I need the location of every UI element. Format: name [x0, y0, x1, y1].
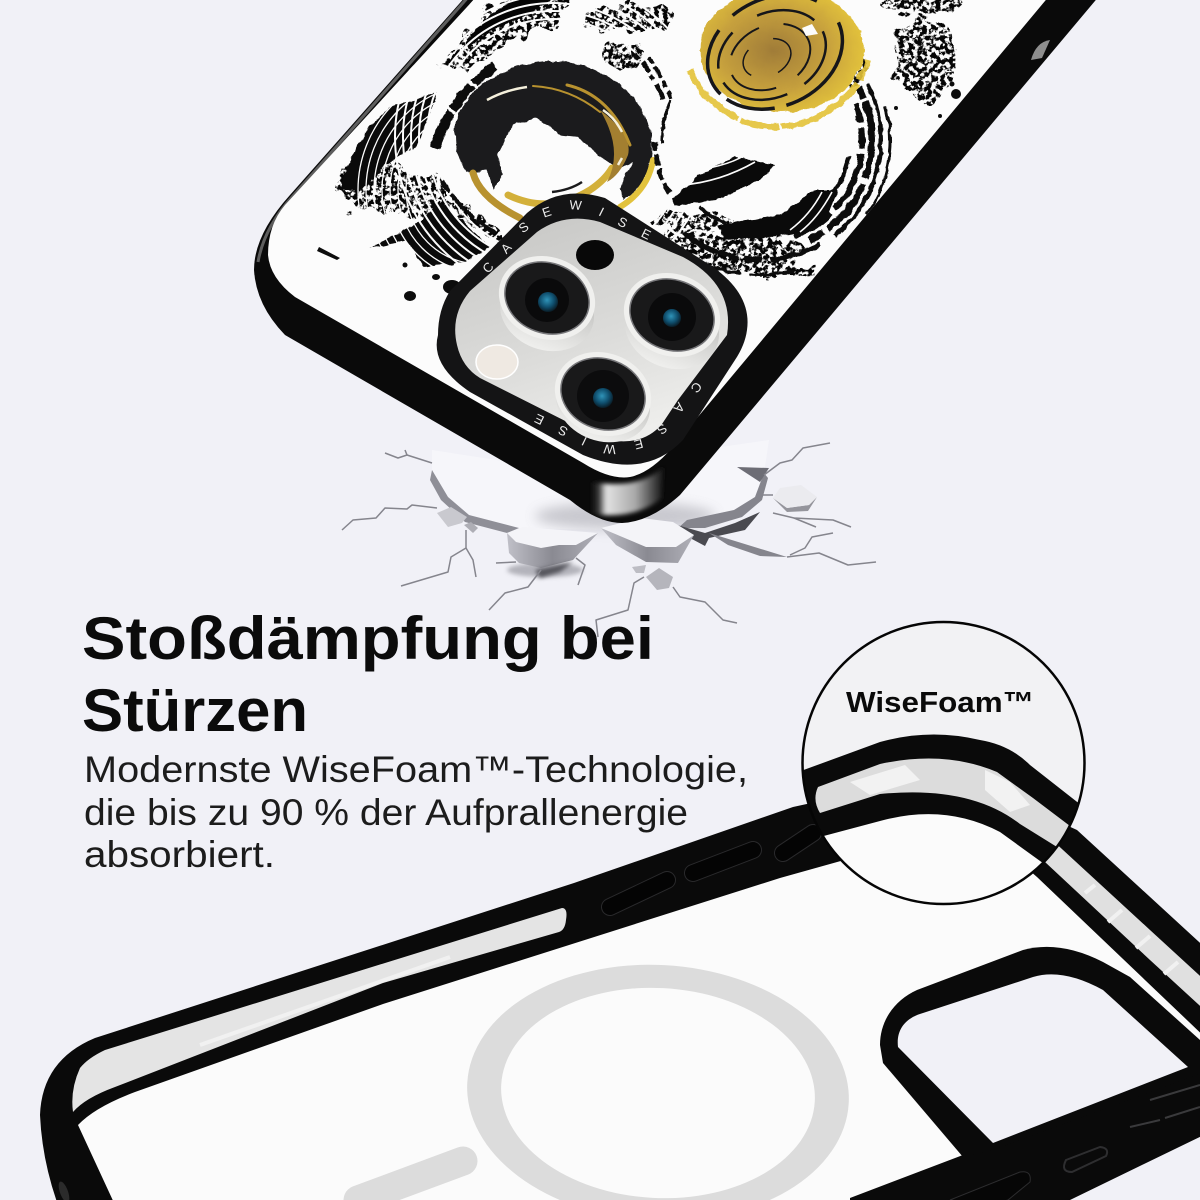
- case body: [254, 0, 1100, 523]
- broken arcs around ring: [430, 52, 672, 235]
- camera cutout opening: [898, 974, 1188, 1143]
- side buttons top: [610, 833, 813, 907]
- heading: Stürzen: [82, 677, 308, 744]
- bottom phone case, inside view: [40, 780, 1200, 1200]
- contact shadow under phone: [535, 502, 715, 530]
- ink brush left with white rings: [340, 93, 490, 267]
- clear back panel: [78, 839, 1200, 1200]
- side button highlight: [1031, 40, 1050, 60]
- body text: absorbiert.: [84, 834, 275, 875]
- WiseFoam magnifier callout: [790, 622, 1090, 905]
- crack lines: [342, 443, 876, 637]
- gold disc with rings: [689, 0, 868, 131]
- white stroke accents in ring: [487, 87, 622, 165]
- right ground plate: [640, 440, 769, 520]
- concentric ink arcs right: [651, 82, 893, 276]
- slot highlights: [200, 885, 1178, 1045]
- lens 1: [487, 243, 607, 364]
- callout label: WiseFoam™: [846, 687, 1034, 719]
- artwork: brush strokes: [317, 0, 965, 312]
- small rock right: [773, 497, 817, 512]
- small rocks left: [437, 507, 467, 527]
- camera cutout frame: [880, 947, 1200, 1157]
- top phone with case: [254, 0, 1096, 523]
- white halo around ring: [605, 62, 620, 72]
- camera bump: [436, 194, 748, 465]
- cracked ground impact: [342, 440, 876, 637]
- body text: die bis zu 90 % der Aufprallenergie: [84, 792, 688, 833]
- dark fissure: [677, 512, 760, 546]
- left ground plate: [432, 450, 610, 530]
- black brush ring: [455, 61, 652, 201]
- body text: Modernste WiseFoam™-Technologie,: [84, 749, 748, 790]
- lens 3: [543, 339, 663, 455]
- ink dots: [317, 82, 961, 301]
- port: [1064, 1147, 1107, 1172]
- foam slot left: [72, 908, 567, 1112]
- alignment bar: [358, 1161, 463, 1200]
- charging hole: [56, 1180, 72, 1200]
- band texture: [1130, 1085, 1200, 1127]
- rim highlight: [258, 0, 470, 262]
- small rocks bottom: [632, 565, 646, 573]
- fragment centre left: [507, 533, 598, 568]
- flash: [476, 345, 518, 379]
- magnified frame: [790, 734, 1090, 905]
- lens 2: [612, 260, 732, 382]
- gold strokes in ring: [473, 85, 653, 218]
- solid ink core top: [465, 0, 555, 48]
- side buttons bottom: [950, 1172, 1030, 1200]
- body text: [84, 749, 748, 875]
- magnetic ring: [461, 955, 855, 1200]
- ink splatter areas: [337, 0, 965, 275]
- case frame: [40, 780, 1200, 1200]
- ink wedge strokes: [672, 157, 838, 240]
- foam slot right: [1045, 838, 1200, 1015]
- fragment centre right: [601, 528, 694, 563]
- fragment shadows: [507, 563, 583, 577]
- heading: Stoßdämpfung bei: [82, 605, 654, 672]
- plate edges: [430, 470, 519, 533]
- camera well: [455, 219, 728, 441]
- heading: [82, 605, 654, 744]
- white artwork face: [268, 0, 1050, 477]
- microphone hole: [576, 240, 614, 270]
- glossy highlight at case corner: [592, 466, 664, 515]
- brand text top: CASEWISE: [484, 200, 652, 272]
- brand text bottom: CASEWISE: [534, 383, 701, 454]
